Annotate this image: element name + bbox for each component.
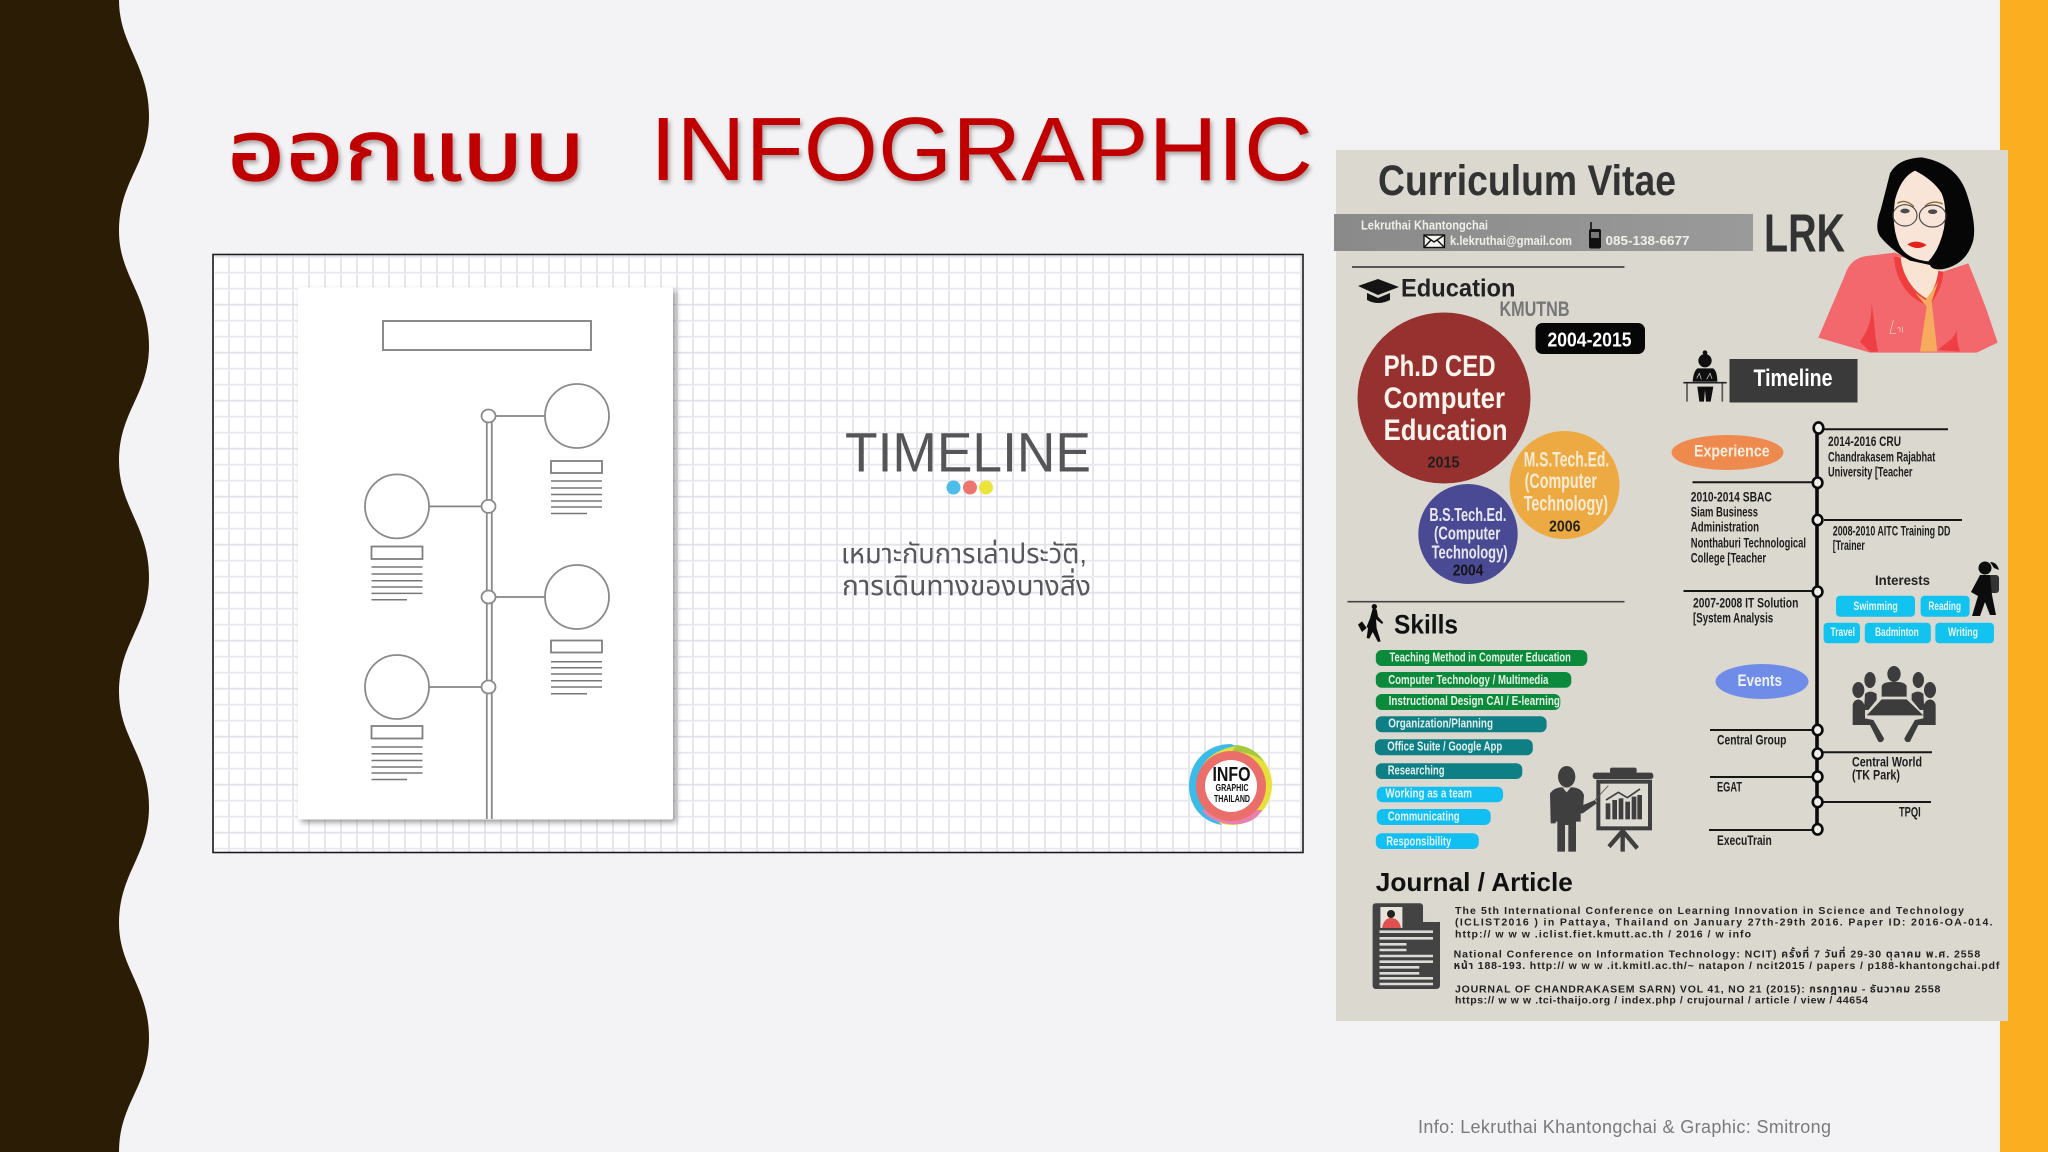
journal text: หน้า 188-193. http:// w w w .it.kmitl.ac.th/~ natapon / ncit2015 / papers / p188-khantongchai.pdf [1454, 959, 2000, 972]
icon: graduation cap [1358, 279, 1399, 303]
education circle: bachelor [1418, 484, 1518, 584]
template circles [365, 384, 609, 719]
career timeline axis [1684, 422, 1962, 834]
poster background [1336, 150, 2008, 1021]
panel: curriculum vitae poster [1334, 150, 2008, 1021]
interest tags: Badminton [1875, 625, 1919, 639]
event labels [1717, 731, 1922, 848]
interest tags [1824, 596, 1994, 643]
event labels: TPQI [1899, 804, 1921, 820]
experience: SBAC [1691, 489, 1806, 566]
panel background grid [213, 254, 1303, 852]
lips [1907, 242, 1927, 248]
icon: mobile phone [1589, 222, 1601, 248]
university label: KMUTNB [1500, 298, 1570, 321]
skill bars: Computer Technology / Multimedia [1388, 673, 1549, 687]
education circle: PhD: Education [1384, 414, 1508, 447]
experience: SBAC: College [Teacher [1691, 550, 1766, 566]
nodes [1813, 422, 1823, 834]
Thai description: การเดินทางของบางสิ่ง [842, 568, 1091, 601]
heading: skills: Skills [1394, 610, 1458, 640]
contact bar: k.lekruthai@gmail.com [1450, 234, 1572, 248]
education years badge [1536, 323, 1645, 354]
event labels: ExecuTrain [1717, 832, 1772, 848]
logo: Info Graphic Thailand: GRAPHIC [1216, 783, 1248, 794]
heading: education: Education [1401, 274, 1516, 302]
heading: education [1358, 274, 1516, 303]
skill bars: Organization/Planning [1388, 716, 1493, 730]
interest tags: Writing [1948, 625, 1978, 639]
brows, eyes, glasses [1893, 201, 1946, 227]
logo: Info Graphic Thailand: INFO [1212, 764, 1250, 786]
timeline axis [487, 416, 492, 819]
experience: SBAC: 2010-2014 SBAC [1691, 489, 1772, 505]
blouse [1915, 282, 1938, 352]
interests heading: Interests [1875, 572, 1930, 588]
skill bars: Researching [1388, 763, 1444, 777]
skill bars [1375, 650, 1587, 849]
education circle: orange master: M.S.Tech.Ed. [1524, 449, 1609, 472]
interest tags: Swimming [1853, 599, 1898, 613]
events badge: Events [1738, 671, 1782, 690]
experience: SBAC: Siam Business [1691, 504, 1758, 520]
experience badge: Experience [1694, 442, 1770, 461]
icon: person at desk [1683, 350, 1727, 402]
template labels and lines [372, 461, 602, 738]
jacket [1818, 253, 1998, 353]
logo: Info Graphic Thailand [1189, 744, 1272, 825]
heading: journal: Journal / Article [1376, 867, 1573, 897]
interest tags: Reading [1928, 599, 1961, 613]
event labels: (TK Park) [1852, 766, 1900, 782]
education circle: PhD: Ph.D CED [1384, 350, 1496, 383]
icon: walking woman [1358, 604, 1383, 642]
experience: SBAC: Nonthaburi Technological [1691, 534, 1806, 550]
skill bars: Working as a team [1385, 787, 1472, 801]
education circle: bachelor: (Computer [1434, 522, 1500, 543]
journal text: National Conference on Information Technology: NCIT) ครั้งที่ 7 วันที่ 29-30 ตุลาคม พ.ศ. 2558 [1454, 947, 1980, 961]
education circle: orange master: Technology) [1524, 493, 1608, 516]
education circle: bachelor: B.S.Tech.Ed. [1429, 504, 1506, 525]
journal text: The 5th International Conference on Learning Innovation in Science and Technology [1455, 905, 1964, 917]
TIMELINE heading: TIMELINE [845, 420, 1091, 484]
contact bar: 085-138-6677 [1606, 234, 1690, 248]
experience: IT Solution: 2007-2008 IT Solution [1693, 595, 1798, 611]
education circle: PhD: Computer [1384, 382, 1505, 415]
left wavy dark band [0, 0, 149, 1152]
panel: timeline template [213, 254, 1303, 852]
journal text [1454, 905, 2000, 1006]
icon: girl with backpack [1971, 562, 1999, 616]
experience badge [1672, 435, 1784, 470]
face [1894, 171, 1945, 261]
icon: meeting table [1852, 666, 1936, 742]
title [227, 100, 1313, 200]
interest tags: Travel [1830, 625, 1855, 639]
contact bar: Lekruthai Khantongchai [1361, 218, 1488, 232]
Thai description: เหมาะกับการเล่าประวัติ, [841, 538, 1087, 569]
timeline badge [1730, 359, 1858, 402]
skill bars: Instructional Design CAI / E-learning [1389, 694, 1560, 708]
contact bar [1334, 214, 1753, 251]
experience: CRU: Chandrakasem Rajabhat [1828, 449, 1936, 465]
experience: SBAC: Administration [1691, 519, 1759, 535]
experience: AITC: [Trainer [1833, 537, 1865, 553]
experience: IT Solution [1693, 595, 1798, 626]
template title box [383, 321, 591, 350]
title: ออกแบบ [227, 104, 585, 198]
skill bars: Communicating [1388, 810, 1460, 824]
neck [1898, 257, 1943, 300]
timeline nodes [482, 410, 496, 694]
skill bars: Teaching Method in Computer Education [1390, 650, 1571, 664]
icon: document [1373, 903, 1440, 989]
experience: IT Solution: [System Analysis [1693, 610, 1773, 626]
hair [1877, 157, 1974, 269]
template document sheet [298, 288, 673, 820]
journal text: (ICLIST2016 ) in Pattaya, Thailand on January 27th-29th 2016. Paper ID: 2016-OA-014. [1455, 917, 1993, 929]
colored dots [946, 480, 993, 494]
divider [1348, 601, 1624, 603]
journal text: JOURNAL OF CHANDRAKASEM SARN) VOL 41, NO 21 (2015): กรกฎาคม - ธันวาคม 2558 [1455, 983, 1940, 995]
education circle: bachelor: 2004 [1453, 563, 1483, 580]
education years badge: 2004-2015 [1548, 330, 1632, 352]
LRK monogram: LRK [1764, 204, 1845, 264]
experience: CRU [1828, 433, 1936, 480]
Thai description [841, 538, 1091, 601]
education circle: PhD: 2015 [1428, 455, 1460, 472]
education circle: orange master: 2006 [1549, 519, 1581, 536]
experience: AITC: 2008-2010 AITC Training DD [1833, 523, 1950, 539]
events badge [1716, 664, 1808, 699]
education circle: orange master: (Computer [1525, 470, 1597, 493]
footer credit: Info: Lekruthai Khantongchai & Graphic: Smitrong [1418, 1117, 1831, 1137]
divider [1352, 266, 1624, 268]
heading: skills [1358, 604, 1458, 642]
education circle: orange master [1510, 431, 1620, 539]
icon: envelope [1424, 235, 1444, 248]
event labels: Central Group [1717, 731, 1786, 747]
journal text: https:// w w w .tci-thaijo.org / index.php / crujournal / article / view / 44654 [1455, 994, 1868, 1006]
event labels: Central World [1852, 754, 1922, 770]
branches [1684, 429, 1962, 830]
education circle: bachelor: Technology) [1432, 541, 1508, 562]
experience: AITC [1833, 523, 1950, 553]
journal text: http:// w w w .iclist.fiet.kmutt.ac.th / 2016 / w info [1455, 929, 1751, 941]
experience: CRU: 2014-2016 CRU [1828, 433, 1901, 449]
timeline badge: Timeline [1754, 365, 1832, 392]
skill bars: Responsibility [1386, 834, 1451, 848]
title: INFOGRAPHIC [650, 100, 1313, 200]
icon: presenter with chart [1550, 766, 1653, 852]
connectors [428, 416, 545, 687]
event labels: EGAT [1717, 779, 1742, 795]
education circle: PhD [1358, 312, 1530, 484]
CV title: Curriculum Vitae [1378, 157, 1676, 205]
signature [1890, 320, 1903, 333]
right orange bar [2000, 0, 2048, 1152]
logo: Info Graphic Thailand: THAILAND [1214, 794, 1250, 805]
experience: CRU: University [Teacher [1828, 464, 1913, 480]
portrait illustration [1818, 157, 1998, 353]
skill bars: Office Suite / Google App [1387, 739, 1502, 753]
